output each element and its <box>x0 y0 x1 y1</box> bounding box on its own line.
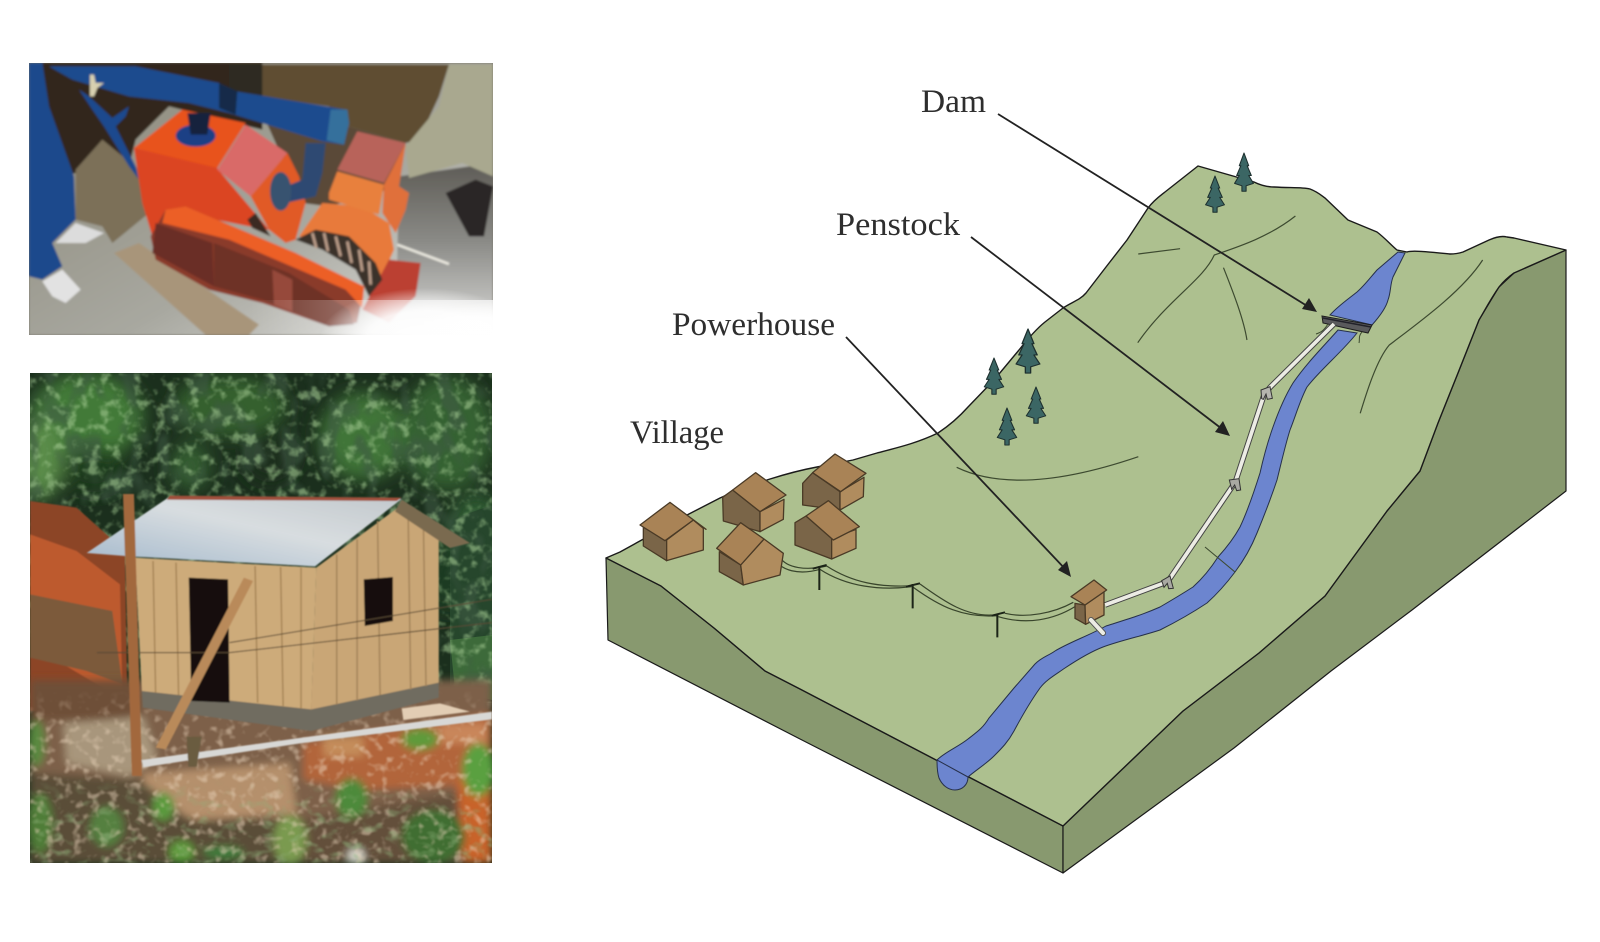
guard <box>151 206 364 326</box>
building <box>87 494 492 776</box>
foliage blobs <box>17 373 507 613</box>
right background <box>396 165 493 300</box>
anchor blocks <box>1261 387 1272 399</box>
burlap sack <box>236 65 449 143</box>
reservoir above dam <box>1330 252 1405 325</box>
label: Powerhouse: Powerhouse <box>672 307 835 343</box>
house 1 <box>640 502 706 561</box>
pine trees <box>984 153 1253 445</box>
tailrace pipe <box>1091 620 1103 633</box>
right trouser leg <box>406 65 493 178</box>
white shoes <box>56 223 104 243</box>
blue pipe <box>49 66 349 145</box>
brace <box>156 578 253 749</box>
ground and plants <box>27 680 494 865</box>
shadow behind elbow <box>267 124 402 206</box>
red soil bank <box>30 501 128 711</box>
generator <box>299 203 394 276</box>
left wall <box>135 558 316 709</box>
red base <box>362 260 421 323</box>
top surface <box>606 166 1566 826</box>
powerhouse building <box>1071 580 1107 624</box>
ground texture <box>30 698 492 863</box>
river crossing line <box>1205 547 1235 572</box>
label: Penstock: Penstock <box>836 207 961 243</box>
slope contour lines <box>1138 216 1483 413</box>
terrain block diagram <box>606 166 1566 873</box>
arrow: dam <box>998 114 1317 312</box>
arrow: penstock <box>971 237 1230 436</box>
dam <box>1316 316 1372 343</box>
label: Village: Village <box>630 415 724 451</box>
right face <box>1063 250 1566 873</box>
river <box>937 252 1405 790</box>
front left face <box>606 558 1063 873</box>
penstock pipe <box>1105 324 1334 605</box>
pipe elbow <box>286 143 326 203</box>
foliage lower right <box>450 507 492 682</box>
arrow: powerhouse <box>846 337 1071 577</box>
foundation <box>142 683 439 731</box>
wires <box>97 599 492 653</box>
photo: turbine generator <box>29 63 493 335</box>
village houses <box>640 454 1107 624</box>
house 5 <box>795 501 859 559</box>
pipe <box>142 712 492 767</box>
right shoe <box>446 180 493 236</box>
roof <box>87 496 402 566</box>
photo: powerhouse building <box>17 373 507 865</box>
label: Dam: Dam <box>921 84 986 120</box>
house 2 <box>723 473 786 532</box>
pole <box>123 494 142 776</box>
house 4 <box>803 454 866 510</box>
house 3 <box>717 523 783 585</box>
window <box>364 577 393 626</box>
red-orange housing <box>134 148 269 236</box>
wood skid <box>114 243 259 335</box>
left jeans <box>29 63 76 280</box>
door <box>189 578 230 703</box>
floor <box>29 63 493 335</box>
dark corner behind pipe <box>29 63 262 176</box>
right wall <box>311 508 439 709</box>
glare <box>326 290 482 335</box>
river mouth line <box>937 760 968 777</box>
fan cage <box>296 230 382 296</box>
power lines and poles <box>773 557 1075 637</box>
foliage texture <box>30 373 492 703</box>
